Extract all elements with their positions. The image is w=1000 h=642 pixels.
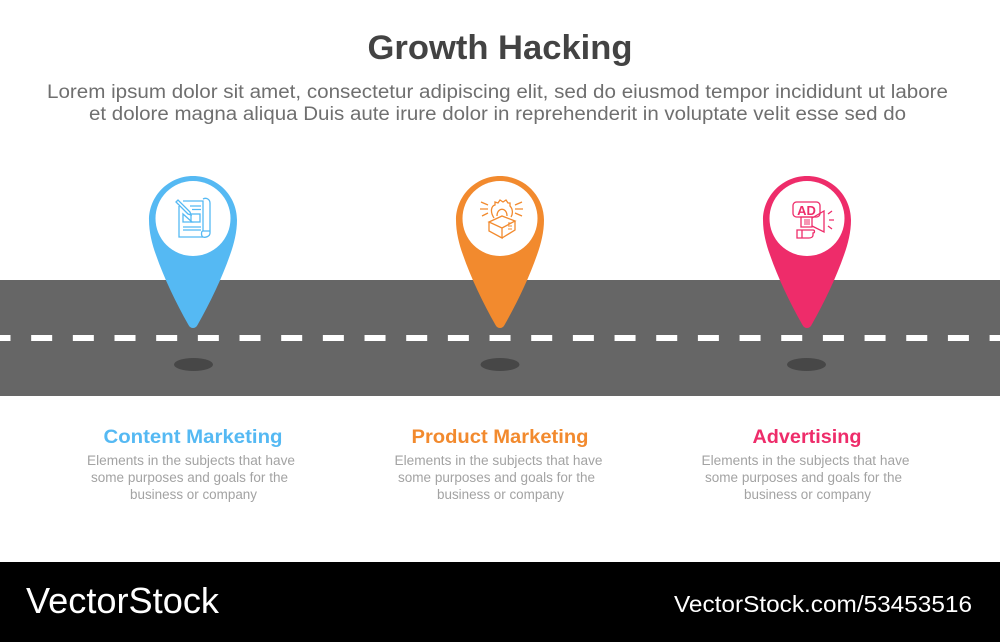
description: advertising: Elements in the subjects that have (702, 453, 910, 468)
description: content marketing: business or company (130, 487, 257, 502)
shadow: pin 1 (174, 358, 213, 371)
heading: advertising: Advertising (752, 427, 862, 448)
pin: content marketing (149, 176, 237, 328)
description: product marketing: some purposes and goals for the (398, 470, 595, 485)
icon: AD megaphone (793, 202, 834, 238)
heading: content marketing: Content Marketing (104, 427, 282, 448)
footer logo: VectorStock (26, 580, 220, 621)
shadow: pin 3 (787, 358, 826, 371)
description: product marketing (394, 453, 602, 502)
column: product marketing (394, 427, 602, 502)
description: advertising (702, 453, 910, 502)
footer bar (0, 562, 1000, 642)
heading: product marketing: Product Marketing (412, 427, 588, 448)
description: content marketing: Elements in the subjects that have (87, 453, 295, 468)
pin: product marketing (456, 176, 544, 328)
subtitle text: et dolore magna aliqua Duis aute irure dolor in reprehenderit in voluptate velit esse sed do (89, 104, 906, 125)
road (0, 280, 1000, 396)
description: advertising: some purposes and goals for the (705, 470, 902, 485)
title: Growth Hacking (368, 29, 632, 67)
subtitle text: Lorem ipsum dolor sit amet, consectetur adipiscing elit, sed do eiusmod tempor incididunt ut labore (47, 82, 948, 103)
icon: blueprint and pencil (176, 198, 210, 237)
icon: AD megaphone: AD (797, 203, 816, 218)
column: advertising (702, 427, 910, 502)
description: advertising: business or company (744, 487, 871, 502)
column: content marketing (87, 427, 295, 502)
shadow: pin 2 (480, 358, 520, 371)
footer url: VectorStock.com/53453516 (674, 591, 972, 617)
description: content marketing: some purposes and goals for the (91, 470, 288, 485)
icon: box and gear (480, 200, 523, 238)
description: product marketing: Elements in the subjects that have (394, 453, 602, 468)
description: product marketing: business or company (437, 487, 564, 502)
description: content marketing (87, 453, 295, 502)
subtitle text (47, 82, 948, 125)
pin: advertising (763, 176, 851, 328)
